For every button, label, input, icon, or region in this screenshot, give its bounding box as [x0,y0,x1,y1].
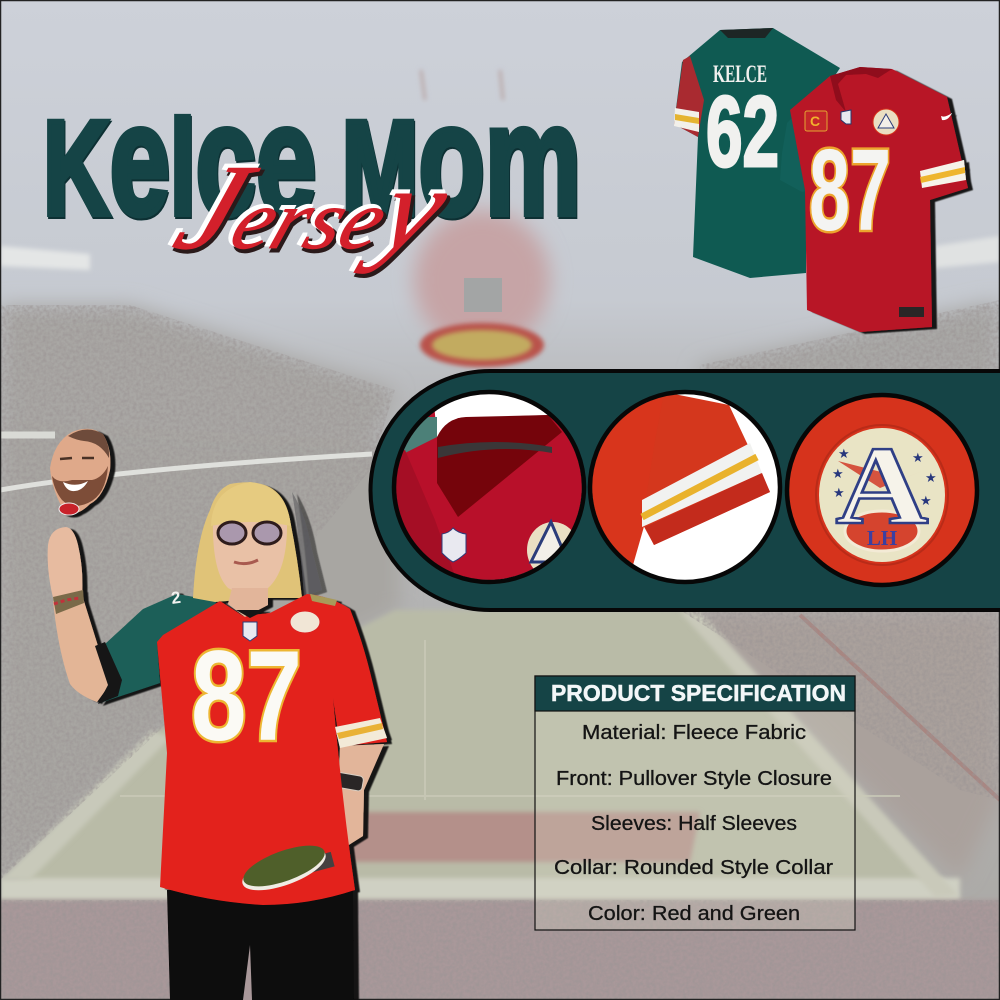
stars: ★ [833,485,845,500]
red Chiefs 87 jersey [790,67,968,332]
jersey name KELCE: KELCE [713,61,767,88]
green sleeve [100,594,217,703]
right arm and hand [322,744,384,848]
LH lettering: LH [867,526,897,550]
subtitle: Jersey script: Jersey [162,144,470,278]
face [213,508,287,594]
table header [535,676,855,711]
watch [333,772,364,791]
spec rows: Sleeves: Half Sleeves [591,813,797,835]
cuff stripes [335,718,387,748]
AFL patch [873,109,899,135]
subtitle: Jersey script: Jersey [160,141,468,275]
subtitle: Jersey script: Jersey [157,138,465,272]
shoulder gold fragment [310,594,337,606]
stars: ★ [912,450,924,465]
spec rows: Collar: Rounded Style Collar [554,857,833,879]
raised arm and hand [48,527,110,702]
bangs [211,482,291,526]
spec rows: Color: Red and Green [588,903,800,925]
stars: ★ [838,446,850,461]
jersey number 87: 87 [809,125,891,255]
stars: ★ [832,466,844,481]
black undershirt [236,610,266,618]
pants [167,885,354,1000]
stars: ★ [925,470,937,485]
spec rows [554,722,833,925]
detail circle: sleeve [590,392,780,590]
detail circle: collar [394,392,584,590]
Nike swoosh [941,113,952,120]
title: Kelce Mom: Kelce Mom [43,72,581,248]
red jersey body [157,594,387,905]
jersey number 62: 62 [706,76,779,188]
shoulder number fragment: 2 [170,588,182,608]
glasses [218,522,281,544]
jersey number 87: 87 [191,625,302,768]
spec rows: Material: Fleece Fabric [582,722,806,744]
NFL shield [841,110,851,124]
woman wearing split jersey [48,482,387,1000]
neck [228,588,268,617]
hair back [193,482,302,602]
table tennis paddle [237,837,335,899]
jock tag [899,307,924,317]
spec rows: Front: Pullover Style Closure [556,768,832,790]
mouth [234,560,258,564]
product specification table [535,676,855,930]
stars [832,446,937,508]
AFL letter A: A [835,424,929,548]
black arm band [95,642,122,704]
gap between legs [243,945,252,1000]
detail panel [370,371,1000,610]
hair shadow strands [292,492,322,596]
detail circle: AFL patch [787,395,977,585]
cut-out head on a stick [50,429,110,515]
captain patch [805,111,827,131]
NFL shield badge [442,528,466,562]
AFL patch [290,611,320,633]
NFL badge [243,622,257,641]
table header: PRODUCT SPECIFICATION [551,680,846,706]
title: Kelce Mom: Kelce Mom [44,74,582,250]
captain patch: C [810,113,820,129]
sleeve stripes [920,160,966,188]
green Kelce 62 jersey [674,28,840,278]
stars: ★ [920,493,932,508]
